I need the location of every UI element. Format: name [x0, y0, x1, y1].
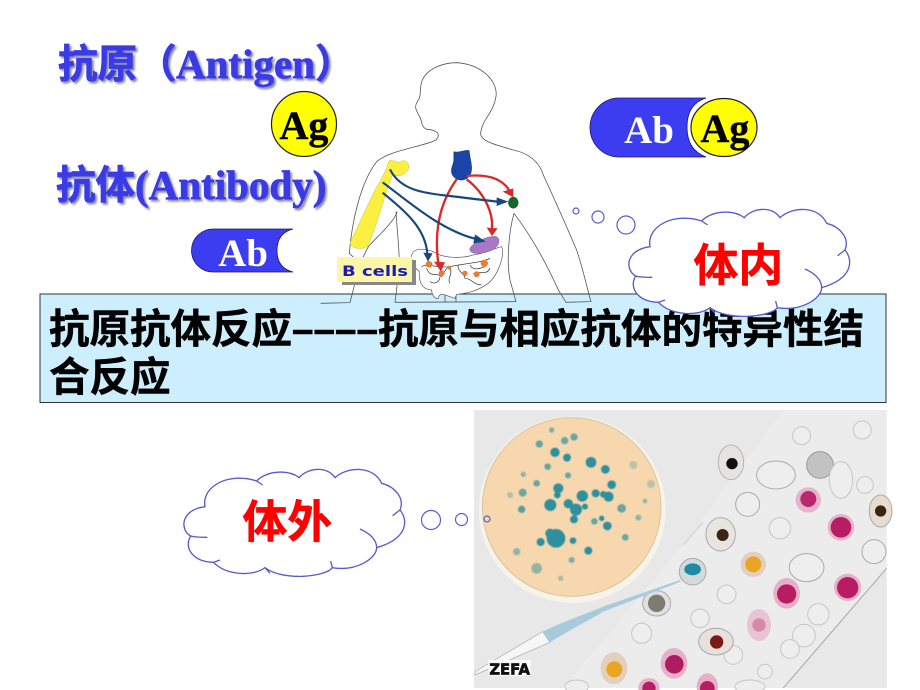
bone: [350, 160, 409, 249]
red arrows: [437, 176, 509, 263]
B cells label: B cells: [342, 264, 408, 280]
definition box: 抗原与相应抗体的特异性结: [378, 306, 864, 352]
antigen symbol: Ag: [280, 103, 328, 148]
body diagram: [321, 63, 591, 303]
ZEFA label: ZEFA: [489, 660, 530, 678]
definition box: 合反应: [49, 354, 170, 400]
antibody-antigen complex: Ag: [701, 106, 749, 151]
cloud: in vivo: 体内: [693, 240, 783, 291]
heading: antigen: Antigen: [176, 41, 315, 87]
cloud: in vivo: [629, 209, 850, 316]
heading: antigen: ）: [315, 43, 354, 87]
test strip: [563, 410, 887, 688]
cloud: in vitro: 体外: [242, 496, 332, 547]
petri dish: [479, 416, 666, 603]
antibody-antigen complex: Ab: [624, 109, 674, 152]
definition box: ––––: [292, 306, 378, 352]
intestines: [412, 247, 503, 299]
spleen: [470, 236, 499, 253]
blue arrows: [383, 169, 498, 253]
filled wells: [601, 445, 892, 690]
definition box: 抗原抗体反应: [49, 306, 292, 352]
body outline: [321, 63, 591, 303]
pipette: [475, 580, 681, 675]
thought bubbles: in vitro: [422, 510, 490, 530]
antibody symbol: [192, 229, 293, 275]
antibody symbol: Ab: [218, 232, 268, 275]
antibody-antigen complex: [590, 98, 757, 157]
heading: antigen: 抗原（: [58, 43, 176, 87]
B cells label: [337, 257, 416, 285]
definition box: [40, 294, 886, 402]
thought bubbles: in vivo: [573, 208, 635, 234]
lymph node: [508, 197, 518, 208]
photo: petri dish and test strip: [474, 410, 892, 690]
heading: antibody: 抗体(Antibody): [56, 162, 326, 208]
cloud: in vitro: [184, 469, 405, 576]
thymus: [451, 150, 472, 180]
empty wells: [565, 421, 886, 690]
antigen symbol: [272, 92, 336, 156]
